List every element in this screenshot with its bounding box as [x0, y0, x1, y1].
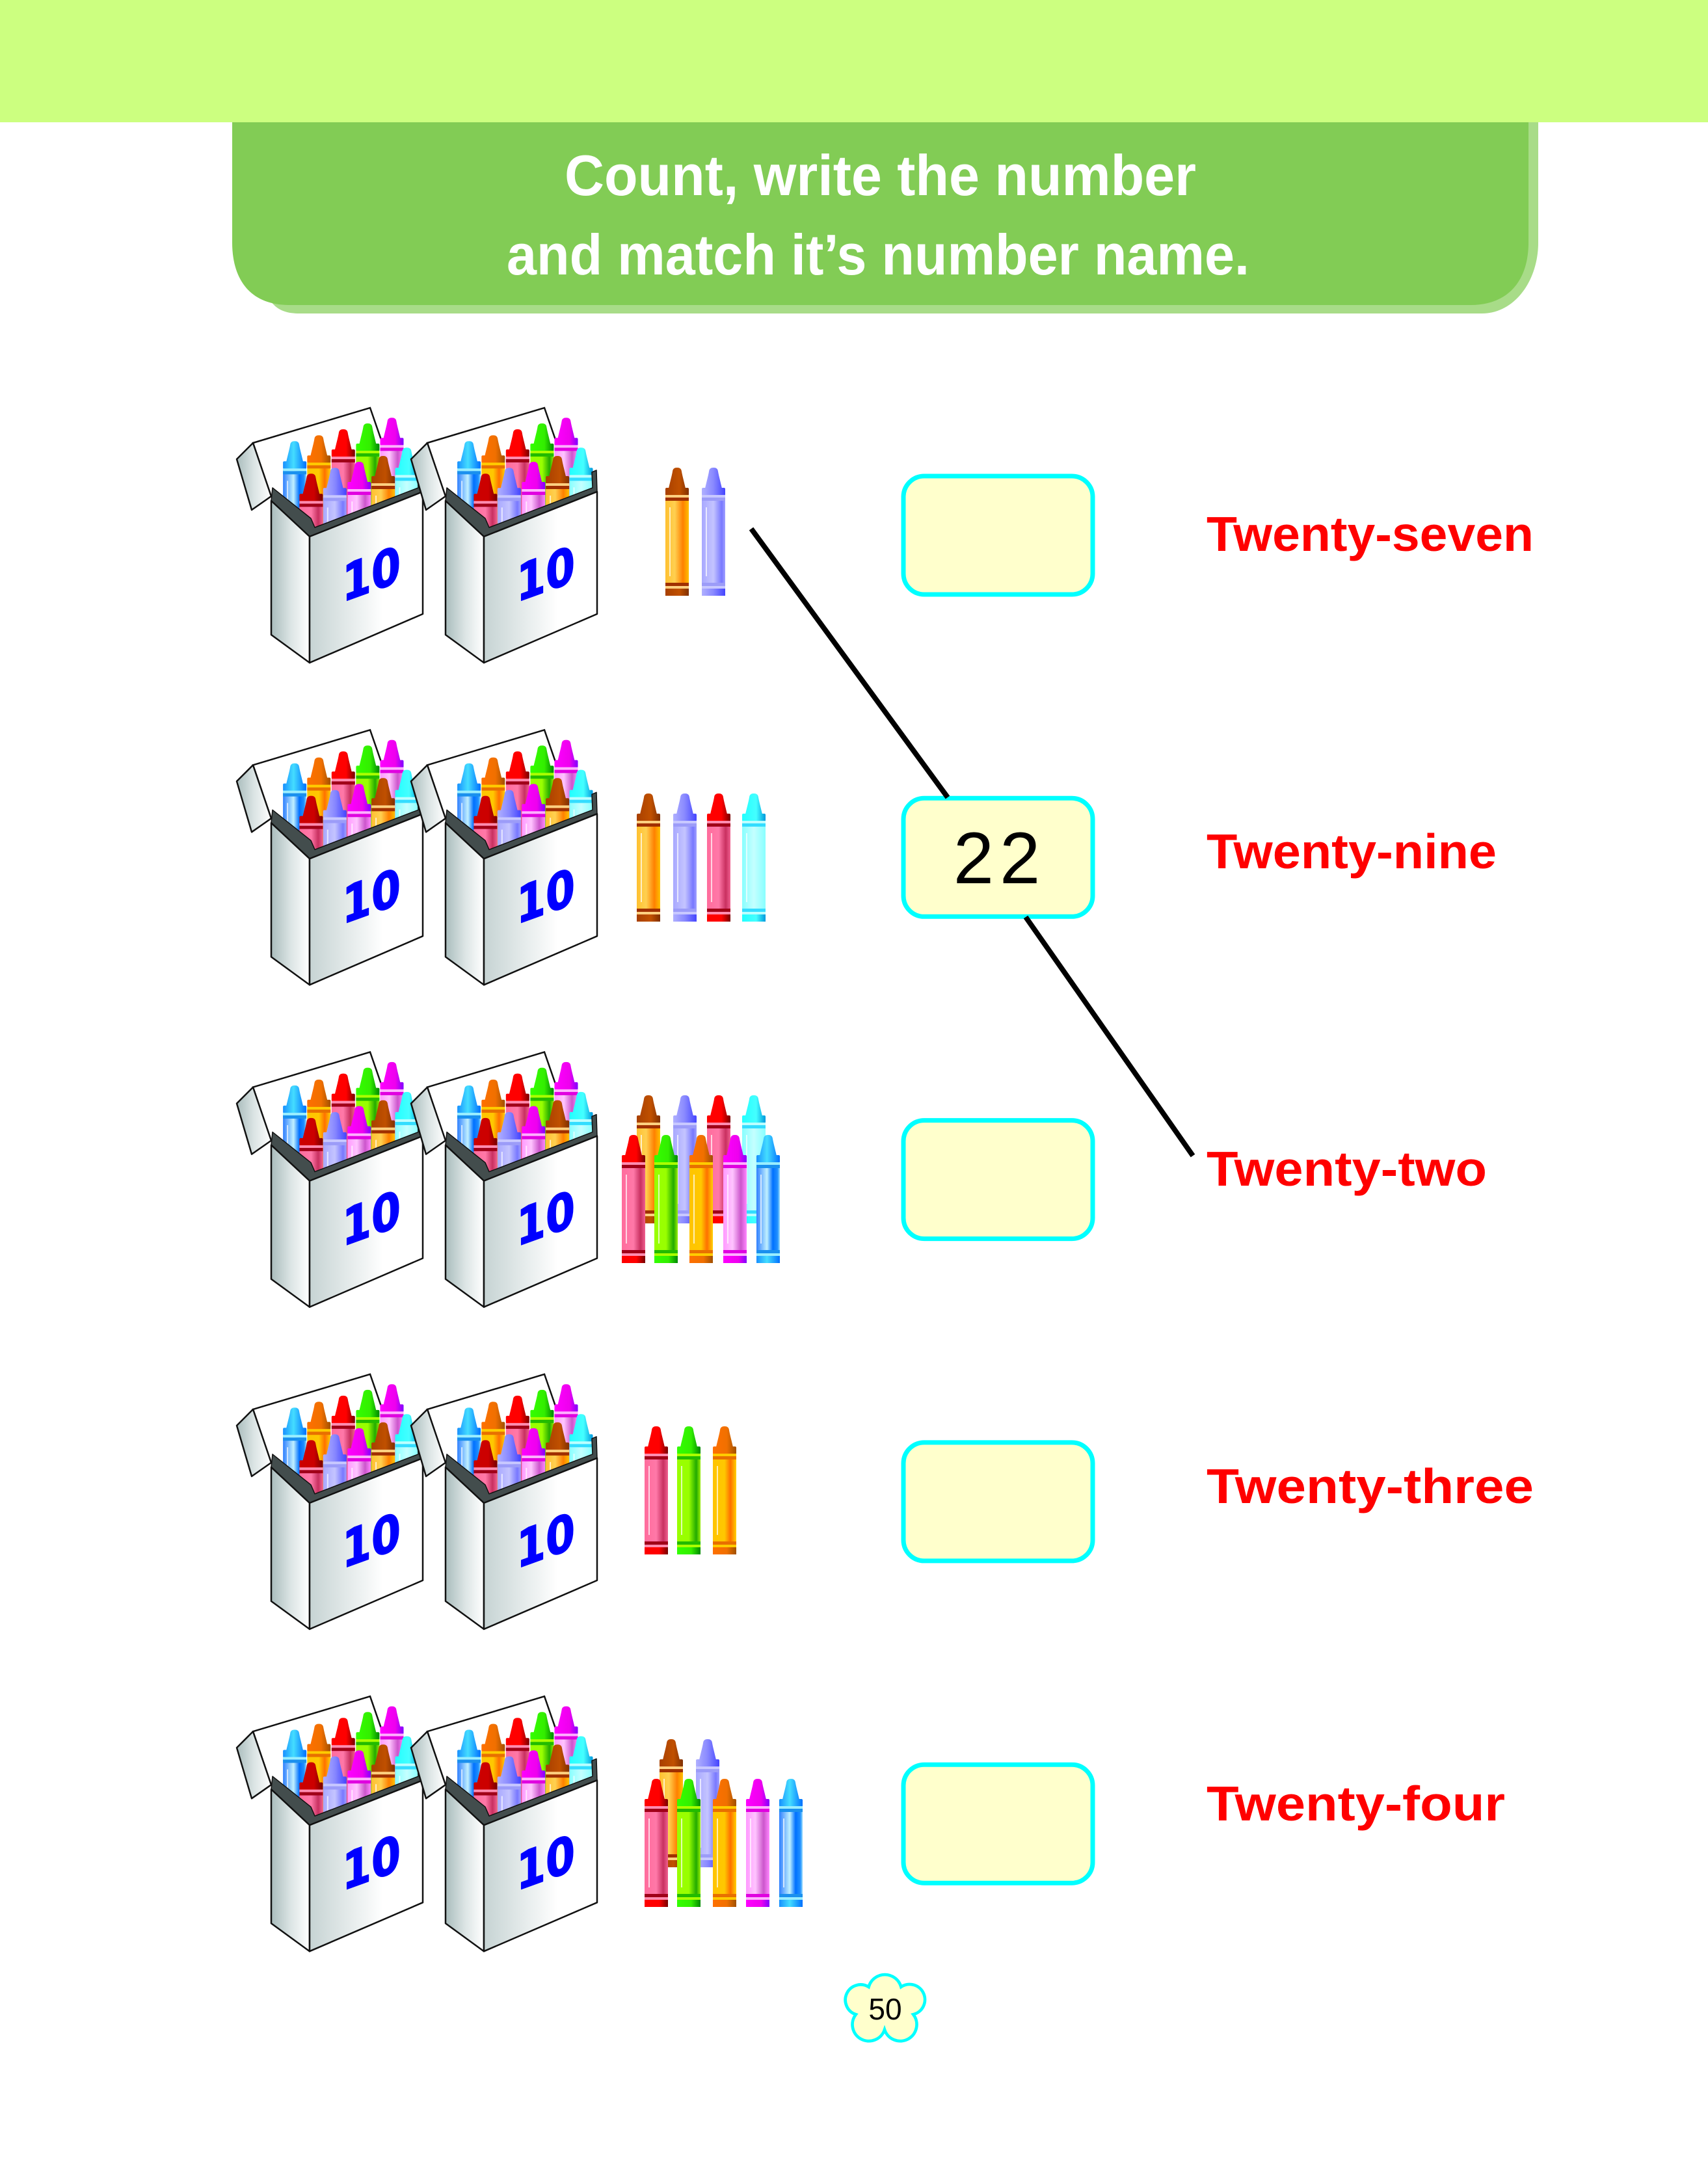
- row 4 crayon boxes: 10: [342, 1500, 401, 1580]
- number name: Twenty-three: Twenty-three: [1207, 1459, 1534, 1513]
- row 2 loose crayons: [637, 793, 766, 922]
- instruction tab: [232, 122, 1528, 305]
- matching line: crayons to 22: [751, 529, 948, 797]
- row 4 crayon boxes: 10: [516, 1500, 575, 1580]
- row 5 crayon boxes: [237, 1696, 597, 1951]
- number name: Twenty-nine: Twenty-nine: [1207, 824, 1497, 879]
- row 5 loose crayons: [645, 1739, 803, 1907]
- row 3 crayon boxes: 10: [342, 1179, 401, 1259]
- title: and match it’s number name.: [507, 222, 1249, 287]
- number name: Twenty-four: Twenty-four: [1207, 1776, 1505, 1831]
- row 3 crayon boxes: 10: [516, 1179, 575, 1259]
- row 2 crayon boxes: 10: [516, 856, 575, 937]
- answer box 5: [903, 1765, 1093, 1883]
- matching line: 22 to Twenty-two: [1026, 917, 1193, 1156]
- row 4 loose crayons: [645, 1426, 736, 1554]
- title: [507, 143, 1249, 287]
- page number flower: [846, 1975, 925, 2041]
- title: Count, write the number: [565, 143, 1196, 207]
- row 2 crayon boxes: [237, 730, 597, 985]
- answer box 2 with 22: 22: [954, 818, 1046, 899]
- answer box 2 with 22: [903, 798, 1093, 916]
- row 5 crayon boxes: 10: [342, 1822, 401, 1903]
- instruction tab shadow: [247, 122, 1538, 313]
- row 1 crayon boxes: 10: [516, 534, 575, 614]
- number name: Twenty-seven: Twenty-seven: [1207, 507, 1534, 561]
- row 1 crayon boxes: 10: [342, 534, 401, 614]
- row 4 crayon boxes: [237, 1374, 597, 1629]
- number name: Twenty-two: Twenty-two: [1207, 1141, 1487, 1196]
- row 5 crayon boxes: 10: [516, 1822, 575, 1903]
- answer box 3: [903, 1121, 1093, 1239]
- row 3 crayon boxes: [237, 1052, 597, 1307]
- row 1 crayon boxes: [237, 408, 597, 663]
- row 3 loose crayons: [622, 1095, 780, 1263]
- answer box 4: [903, 1443, 1093, 1561]
- row 1 loose crayons: [665, 468, 725, 596]
- page number flower: 50: [868, 1992, 902, 2026]
- top band: [0, 0, 1708, 122]
- row 2 crayon boxes: 10: [342, 856, 401, 937]
- answer box 1: [903, 476, 1093, 594]
